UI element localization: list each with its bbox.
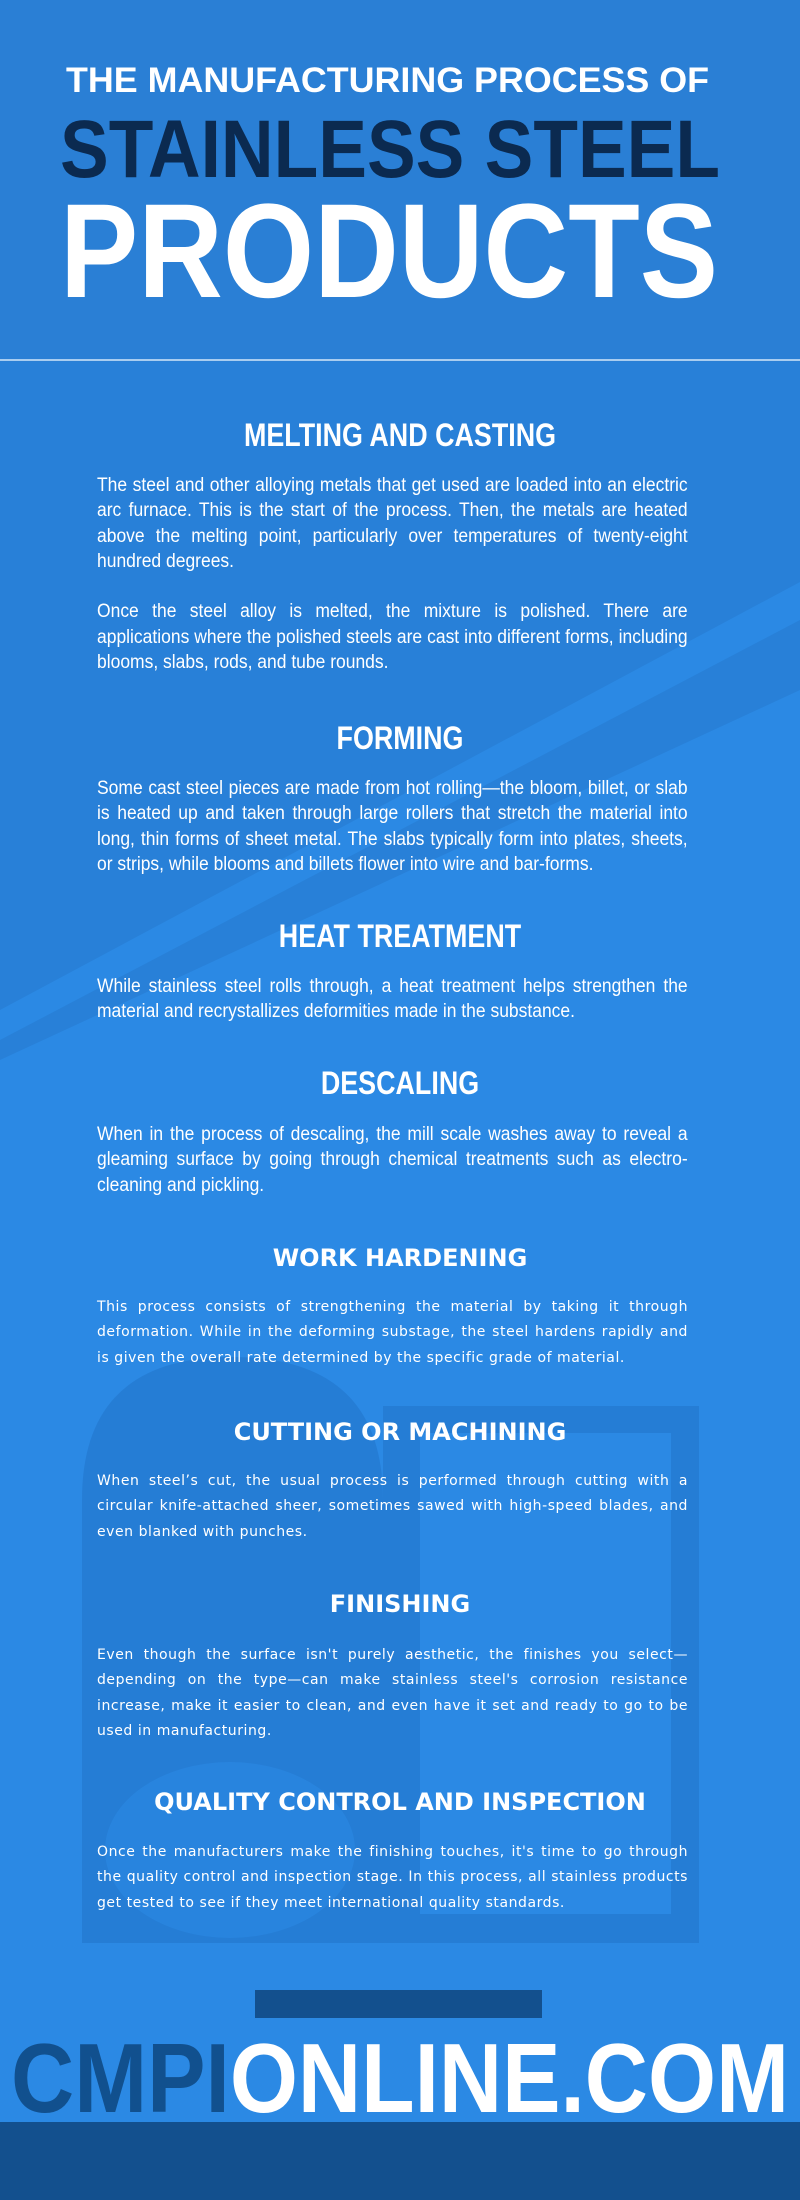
text: cutting: When steel’s cut, the usual process is performed through cutting with a circular knife-attached sheer, sometimes sawed with high-speed blades, and even blanked with punches. [97, 1473, 688, 1540]
heading: finishing: FINISHING [330, 1590, 470, 1618]
text: heat treatment: While stainless steel rolls through, a heat treatment helps strengthen the material and recrystallizes deformities made in the substance. [97, 976, 688, 1022]
heading: quality control: QUALITY CONTROL AND INSPECTION [154, 1788, 646, 1816]
text: quality control: Once the manufacturers make the finishing touches, it's time to go through the quality control and inspection stage. In this process, all stainless products get tested to see if they meet international quality standards. [97, 1844, 688, 1911]
heading: forming: FORMING [337, 720, 463, 756]
text: melting: Once the steel alloy is melted, the mixture is polished. There are applications where the polished steels are cast into different forms, including blooms, slabs, rods, and tube rounds. [97, 601, 688, 673]
text: work hardening: This process consists of strengthening the material by taking it through deformation. While in the deforming substage, the steel hardens rapidly and is given the overall rate determined by the specific grade of material. [97, 1299, 688, 1366]
title: PRODUCTS [60, 177, 718, 326]
footer bar [255, 1990, 542, 2018]
heading: melting and casting: MELTING AND CASTING [244, 417, 556, 453]
bottom band [0, 2122, 800, 2200]
text: descaling: When in the process of descaling, the mill scale washes away to reveal a gleaming surface by going through chemical treatments such as electro-cleaning and pickling. [97, 1124, 688, 1196]
title: THE MANUFACTURING PROCESS OF [66, 61, 709, 100]
text: forming: Some cast steel pieces are made from hot rolling—the bloom, billet, or slab is heated up and taken through large rollers that stretch the material into long, thin forms of sheet metal. The slabs typically form into plates, sheets, or strips, while blooms and billets flower into wire and bar-forms. [97, 778, 688, 875]
watermark logo [82, 1357, 699, 1943]
header [0, 0, 800, 362]
title [60, 61, 720, 326]
text: melting: The steel and other alloying metals that get used are loaded into an electric arc furnace. This is the start of the process. Then, the metals are heated above the melting point, particularly over temperatures of twenty-eight hundred degrees. [97, 475, 688, 572]
heading: heat treatment: HEAT TREATMENT [279, 918, 521, 954]
text: melting [97, 475, 688, 673]
heading: work hardening: WORK HARDENING [273, 1244, 527, 1272]
text: finishing: Even though the surface isn't purely aesthetic, the finishes you select—depending on the type—can make stainless steel's corrosion resistance increase, make it easier to clean, and even have it set and ready to go to be used in manufacturing. [97, 1647, 688, 1739]
title: STAINLESS STEEL [60, 104, 720, 195]
heading: cutting or machining: CUTTING OR MACHINING [234, 1418, 566, 1446]
heading: descaling: DESCALING [321, 1065, 479, 1101]
